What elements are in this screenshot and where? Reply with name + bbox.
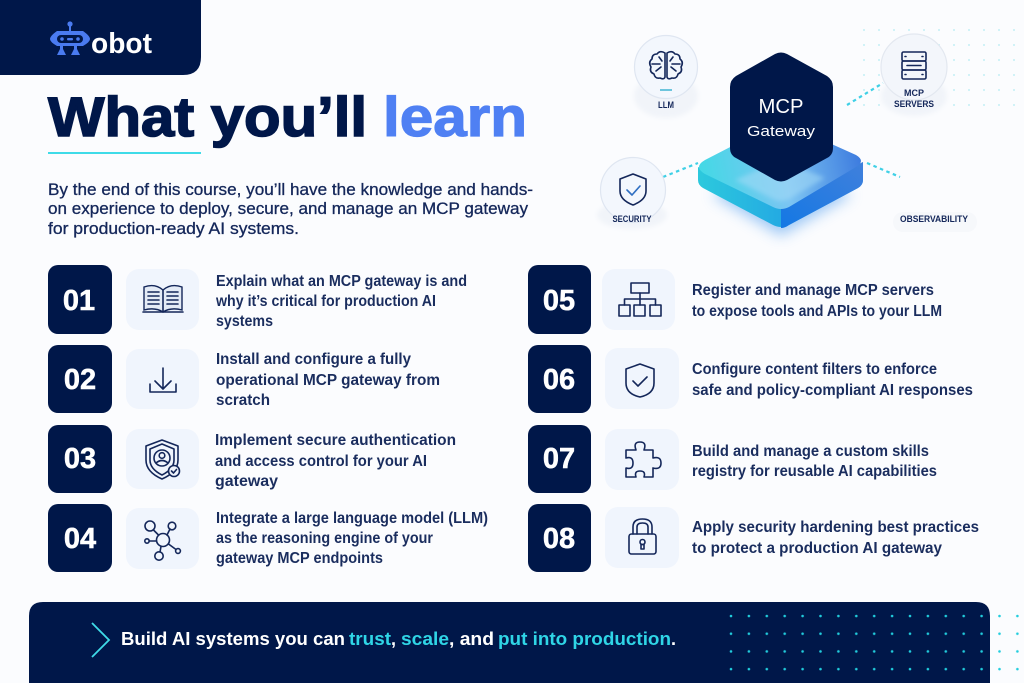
text 05: to expose tools and APIs to your LLM	[692, 303, 942, 320]
banner text: put into production	[498, 629, 671, 649]
item 02	[48, 345, 440, 413]
text 02: scratch	[216, 392, 270, 409]
icon: open book	[126, 269, 199, 330]
text 08	[692, 519, 979, 557]
node: security	[597, 158, 667, 229]
intro text: By the end of this course, you’ll have the knowledge and hands-	[48, 181, 533, 199]
banner text: .	[671, 629, 676, 649]
text 08: Apply security hardening best practices	[692, 519, 979, 536]
icon: obot robot logo	[50, 21, 90, 55]
diagram: MCP gateway	[597, 28, 1024, 236]
icon: shield check	[605, 348, 679, 409]
number badge 08	[528, 504, 591, 572]
number badge 01	[48, 265, 112, 334]
item 08	[528, 504, 979, 572]
text 07: registry for reusable AI capabilities	[692, 463, 937, 480]
text 07: Build and manage a custom skills	[692, 443, 929, 460]
text 08: to protect a production AI gateway	[692, 540, 942, 557]
text 07	[692, 443, 937, 480]
text 06: safe and policy-compliant AI responses	[692, 382, 973, 399]
node: observability	[893, 212, 977, 232]
logo panel	[0, 0, 201, 75]
connector: MCP servers	[847, 83, 883, 105]
number badge 05	[528, 265, 591, 334]
icon: server stack	[902, 52, 926, 79]
background dot grid	[860, 28, 1024, 108]
banner text: Build AI systems you can	[121, 629, 345, 649]
banner dot grid	[729, 614, 1024, 674]
hexagon: MCP Gateway: MCP	[758, 96, 804, 118]
text 04	[216, 510, 488, 567]
platform shadow	[712, 160, 852, 236]
icon: org chart	[602, 269, 675, 330]
title: learn	[383, 85, 527, 148]
logo wordmark: obot	[91, 28, 152, 60]
banner text: ,	[391, 629, 396, 649]
connector: security	[663, 163, 698, 177]
text 01: Explain what an MCP gateway is and	[216, 273, 467, 290]
platform	[698, 122, 863, 228]
text 02: Install and configure a fully	[216, 351, 411, 368]
intro text	[48, 181, 533, 238]
item 07	[528, 425, 937, 493]
text 03: Implement secure authentication	[215, 432, 456, 449]
node: MCP servers: MCP	[904, 88, 924, 98]
text 02: operational MCP gateway from	[216, 372, 440, 389]
title: What you’ll	[48, 85, 367, 148]
node: security: SECURITY	[612, 214, 652, 224]
icon: chevron	[92, 623, 109, 657]
item 03	[48, 425, 456, 493]
number badge 06: 06	[543, 364, 575, 396]
text 06: Configure content filters to enforce	[692, 361, 937, 378]
node: LLM: LLM	[658, 100, 674, 110]
icon: padlock	[605, 507, 679, 568]
number badge 07	[528, 425, 591, 493]
icon: brain	[650, 52, 682, 79]
text 05	[692, 282, 942, 320]
number badge 01: 01	[63, 285, 95, 317]
banner text: scale	[401, 629, 449, 649]
text 04: Integrate a large language model (LLM)	[216, 510, 488, 527]
number badge 03: 03	[64, 443, 96, 475]
number badge 02	[48, 345, 112, 413]
number badge 03	[48, 425, 112, 493]
node: LLM	[634, 36, 698, 118]
text 04: gateway MCP endpoints	[216, 550, 383, 567]
text 02	[216, 351, 440, 409]
node: MCP servers	[881, 34, 947, 116]
banner text: , and	[449, 629, 494, 649]
number badge 06	[528, 345, 591, 413]
icon: shield check	[620, 174, 646, 205]
hexagon: MCP Gateway	[730, 52, 833, 182]
item 05	[528, 265, 942, 334]
number badge 02: 02	[64, 364, 96, 396]
number badge 07: 07	[543, 443, 575, 475]
banner text	[121, 629, 676, 649]
icon: shield user	[126, 429, 199, 489]
title	[48, 85, 527, 148]
text 06	[692, 361, 973, 399]
bottom banner	[29, 602, 1024, 683]
text 05: Register and manage MCP servers	[692, 282, 934, 299]
hexagon: MCP Gateway: Gateway	[747, 123, 816, 140]
number badge 04	[48, 504, 112, 572]
text 04: as the reasoning engine of your	[216, 530, 433, 547]
text 03: and access control for your AI	[215, 453, 427, 470]
item 06	[528, 345, 973, 413]
node: observability: OBSERVABILITY	[900, 214, 968, 224]
text 03: gateway	[215, 473, 278, 490]
item 04	[48, 504, 488, 572]
number badge 05: 05	[543, 285, 575, 317]
banner text: trust	[349, 629, 391, 649]
icon: puzzle piece	[605, 429, 679, 490]
node: MCP servers: SERVERS	[894, 99, 934, 109]
icon: network nodes	[126, 508, 199, 569]
text 01: why it’s critical for production AI	[215, 293, 436, 310]
text 03	[215, 432, 456, 490]
number badge 04: 04	[64, 523, 96, 555]
intro text: for production-ready AI systems.	[48, 220, 299, 238]
title underline	[48, 152, 201, 154]
connector: observability	[867, 163, 900, 177]
text 01	[215, 273, 467, 330]
icon: download	[126, 349, 199, 409]
intro text: on experience to deploy, secure, and manage an MCP gateway	[48, 200, 529, 218]
number badge 08: 08	[543, 523, 575, 555]
item 01	[48, 265, 467, 334]
text 01: systems	[216, 313, 273, 330]
